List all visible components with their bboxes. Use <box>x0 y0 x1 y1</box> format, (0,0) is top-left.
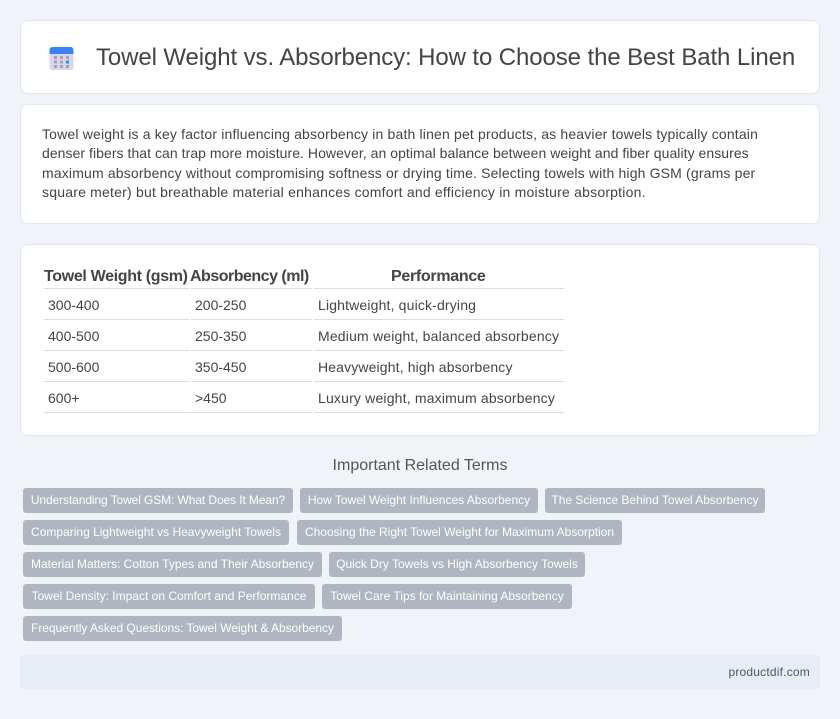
tag <box>23 552 322 577</box>
tag: Frequently Asked Questions: Towel Weight & Absorbency <box>31 621 334 635</box>
tag: Choosing the Right Towel Weight for Maximum Absorption <box>305 525 614 539</box>
row 3: 350-450 <box>195 359 246 375</box>
row 1: 300-400 <box>48 297 99 313</box>
tag <box>23 520 289 545</box>
header row: Performance <box>391 268 486 285</box>
row 4 <box>48 390 555 406</box>
row 3: Heavyweight, high absorbency <box>318 359 513 375</box>
tag <box>545 488 765 513</box>
row 1: 200-250 <box>195 297 246 313</box>
tag: How Towel Weight Influences Absorbency <box>308 493 530 507</box>
tag: Material Matters: Cotton Types and Their Absorbency <box>31 557 314 571</box>
tag: Understanding Towel GSM: What Does It Mean? <box>31 493 285 507</box>
tag: Towel Density: Impact on Comfort and Performance <box>32 589 306 603</box>
tag <box>329 552 585 577</box>
tags: related terms <box>23 488 765 641</box>
heading: important related terms: Important Related Terms <box>333 457 507 474</box>
header row: Absorbency (ml) <box>190 268 309 285</box>
intro paragraph: maximum absorbency without compromising softness or drying time. Selecting towels with high GSM (grams per <box>42 165 755 181</box>
title: Towel Weight vs. Absorbency: How to Choose the Best Bath Linen <box>96 44 795 71</box>
footer bar <box>20 655 820 689</box>
tag: Comparing Lightweight vs Heavyweight Towels <box>31 525 281 539</box>
header row <box>44 268 486 285</box>
header row: Towel Weight (gsm) <box>44 268 188 285</box>
intro paragraph: denser fibers that can trap more moisture. However, an optimal balance between weight and fiber quality ensures <box>42 145 749 161</box>
row 4: >450 <box>195 390 227 406</box>
tag: Quick Dry Towels vs High Absorbency Towels <box>336 557 578 571</box>
row 2: Medium weight, balanced absorbency <box>318 328 559 344</box>
row 2: 400-500 <box>48 328 99 344</box>
icon: calendar <box>50 47 74 70</box>
row 1 <box>48 297 476 313</box>
table <box>44 268 564 413</box>
panel: title card <box>20 20 820 94</box>
row 3: 500-600 <box>48 359 99 375</box>
tag <box>300 488 538 513</box>
tag <box>23 584 315 609</box>
row 3 <box>48 359 513 375</box>
panel: table <box>20 244 820 436</box>
row 4: 600+ <box>48 390 80 406</box>
tag: Towel Care Tips for Maintaining Absorbency <box>330 589 564 603</box>
intro paragraph <box>42 126 758 200</box>
tag <box>23 616 342 641</box>
row 1: Lightweight, quick-drying <box>318 297 476 313</box>
row 2: 250-350 <box>195 328 246 344</box>
row 4: Luxury weight, maximum absorbency <box>318 390 555 406</box>
tag: The Science Behind Towel Absorbency <box>551 493 759 507</box>
footer source text: productdif.com <box>728 665 810 679</box>
panel: intro text <box>20 104 820 224</box>
row 2 <box>48 328 559 344</box>
intro paragraph: square meter) but breathable material enhances comfort and efficiency in moisture absorption. <box>42 184 646 200</box>
tag <box>322 584 572 609</box>
intro paragraph: Towel weight is a key factor influencing absorbency in bath linen pet products, as heavier towels typically contain <box>42 126 758 142</box>
tag <box>297 520 622 545</box>
tag <box>23 488 293 513</box>
